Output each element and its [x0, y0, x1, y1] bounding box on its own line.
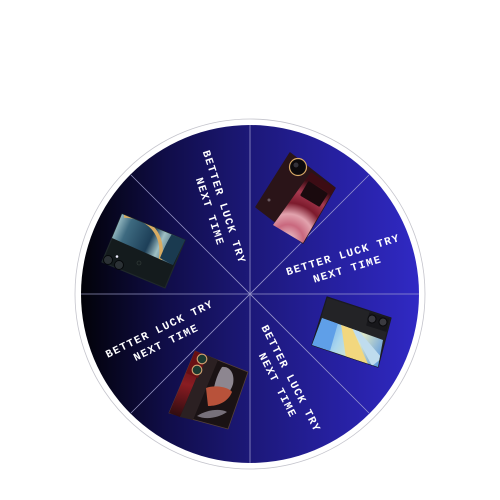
spin wheel	[75, 119, 425, 469]
phone: iqoo, lower right	[312, 297, 391, 367]
phone: vivo, upper right	[256, 153, 335, 243]
outer ring	[75, 119, 425, 469]
label: lower right segment: BETTER LUCK TRY	[258, 324, 322, 435]
label: lower left segment: BETTER LUCK TRY	[104, 299, 216, 362]
label: upper left segment: NEXT TIME	[192, 176, 225, 248]
label: upper right segment: NEXT TIME	[312, 254, 384, 287]
label: lower right segment: NEXT TIME	[255, 351, 298, 420]
label: upper right segment: BETTER LUCK TRY	[285, 233, 402, 279]
phone: oneplus, upper left	[102, 214, 185, 288]
label: lower left segment: NEXT TIME	[132, 323, 201, 365]
wheel disk	[81, 125, 419, 463]
phone: vivo fold, lower left	[169, 351, 248, 429]
label: upper left segment: BETTER LUCK TRY	[199, 149, 247, 266]
segment dividers	[81, 125, 419, 463]
